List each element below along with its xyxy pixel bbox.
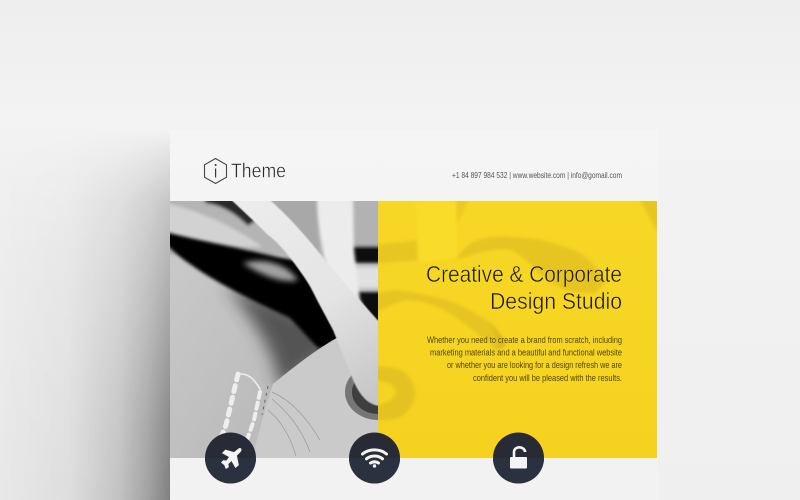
icon: unlocked padlock badge (493, 432, 544, 484)
eyelet (345, 375, 378, 420)
heading: Creative & Corporate (426, 261, 622, 287)
panel: flyer sheet (170, 158, 657, 484)
logo: hexagon icon and Theme wordmark (204, 158, 286, 184)
soft grey falloff on leather (221, 286, 324, 390)
stitch shadow (262, 386, 268, 415)
grey blob inside shadow (243, 261, 298, 281)
body paragraph: or whether you are looking for a design refresh we are (447, 360, 622, 370)
icon: airplane badge (205, 432, 256, 484)
icon: hexagon i (204, 158, 226, 184)
flap creases (268, 392, 320, 456)
body paragraph (427, 335, 622, 383)
ghost: lower arc (378, 290, 498, 350)
yellow panel with ghosted lace (375, 198, 660, 458)
main lace (228, 197, 382, 406)
left blurred lace (165, 203, 262, 247)
body paragraph: marketing materials and a beautiful and functional website (430, 348, 622, 358)
dark shadow band (165, 232, 345, 348)
contact details: +1 84 897 984 532 | www.website.com | info@gomail.com (452, 171, 622, 180)
leather flap (254, 320, 378, 458)
rear vertical lace (315, 201, 366, 308)
heading: Design Studio (490, 288, 622, 314)
body paragraph: Whether you need to create a brand from scratch, including (427, 335, 622, 345)
icon: wifi badge (349, 432, 400, 484)
stitching (220, 374, 260, 440)
body paragraph: confident you will be pleased with the results. (473, 373, 622, 383)
ghost: top corner shadow (457, 201, 468, 218)
right strips (350, 246, 383, 263)
upper grey backdrop (170, 201, 378, 256)
ghost: vertical lace (416, 198, 456, 262)
heading (426, 261, 622, 314)
ghost: eyelet (375, 367, 415, 420)
wordmark: Theme (231, 160, 286, 182)
page background with sheet shadow (4, 146, 170, 500)
photo: shoe lace in greyscale (170, 201, 378, 458)
ghost: left dark band (378, 240, 418, 264)
ghost: upper arc (456, 236, 605, 293)
